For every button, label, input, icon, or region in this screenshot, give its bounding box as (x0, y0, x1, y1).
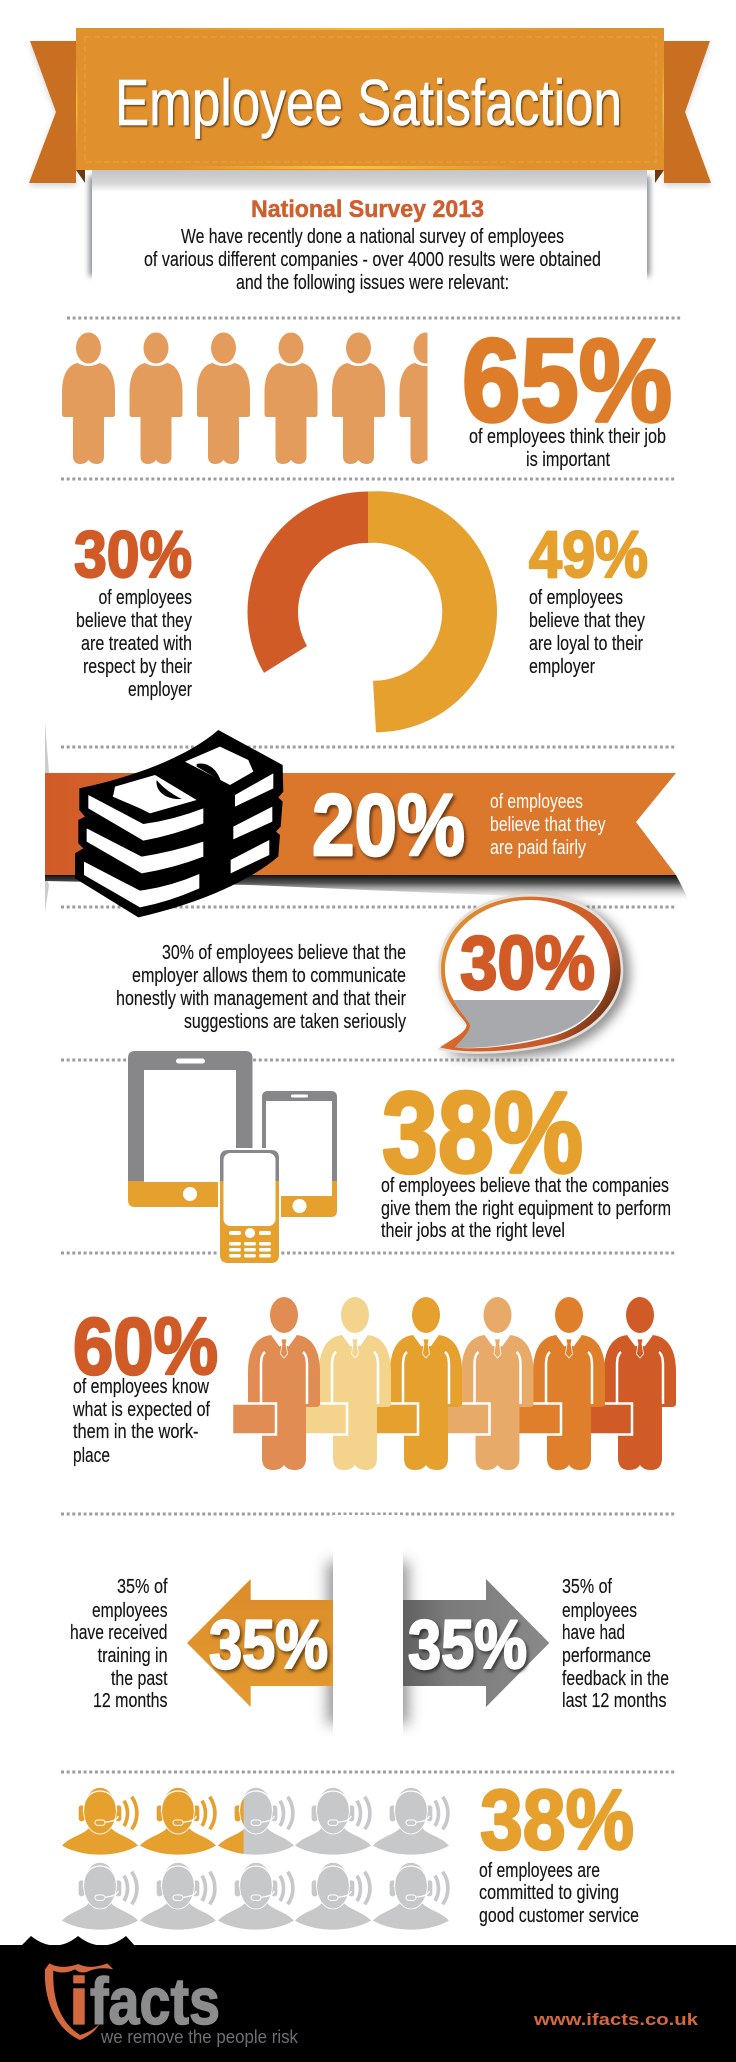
icon: devices (128, 1051, 339, 1265)
caption: of employees think their job (469, 426, 666, 448)
caption loyal: believe that they (529, 610, 645, 632)
caption communication: 30% of employees believe that the (162, 942, 406, 964)
speech bubble (437, 894, 630, 1058)
dotted dividers (61, 318, 682, 1772)
section: equipment (128, 1051, 671, 1265)
caption equipment: give them the right equipment to perform (381, 1198, 671, 1220)
footer (0, 1936, 736, 2062)
stat 38% service: 38% (480, 1773, 634, 1868)
caption training: training in (98, 1645, 168, 1667)
icon: stack of money (75, 730, 283, 917)
caption training: the past (111, 1668, 168, 1690)
caption equipment (381, 1175, 671, 1242)
caption expectations: them in the work- (73, 1421, 198, 1443)
arrow: left orange: 35% (209, 1606, 328, 1683)
caption equipment: of employees believe that the companies (381, 1175, 669, 1197)
caption expectations: of employees know (73, 1376, 209, 1398)
caption feedback: 35% of (562, 1576, 612, 1598)
icon: tablet (128, 1051, 252, 1207)
caption respect: respect by their (83, 656, 192, 678)
donut (247, 491, 497, 732)
section: 20% pay banner (45, 722, 690, 917)
caption respect: are treated with (81, 633, 192, 655)
website url: www.ifacts.co.uk (533, 2010, 699, 2029)
caption pay (490, 791, 606, 859)
caption pay: of employees (490, 791, 583, 813)
stat 20%: 20% (312, 777, 465, 874)
caption feedback (562, 1576, 669, 1712)
caption communication: suggestions are taken seriously (184, 1011, 406, 1033)
caption loyal: employer (529, 656, 595, 678)
title ribbon (29, 28, 711, 305)
caption loyal: of employees (529, 587, 623, 609)
caption respect (76, 587, 192, 701)
section: communication speech bubble (116, 894, 630, 1058)
caption training: have received (70, 1622, 168, 1644)
section: customer service (62, 1773, 639, 1930)
icon: shield (45, 1963, 113, 2040)
stat 60%: 60% (73, 1302, 218, 1392)
caption feedback: employees (562, 1600, 637, 1622)
icon row: people (62, 332, 452, 464)
caption pay: believe that they (490, 814, 606, 836)
section: expectations (72, 1297, 676, 1470)
logo: ifacts (45, 1963, 299, 2047)
caption communication: employer allows them to communicate (132, 965, 406, 987)
caption equipment: their jobs at the right level (381, 1220, 565, 1242)
caption service (479, 1860, 639, 1927)
caption respect: employer (128, 679, 192, 701)
intro text (144, 196, 601, 294)
caption communication: honestly with management and that their (116, 988, 406, 1010)
caption training: employees (92, 1600, 168, 1622)
arrow: right grey: 35% (408, 1606, 527, 1683)
icon: smartphone (260, 1089, 339, 1219)
stat 30% communication: 30% (460, 921, 595, 1006)
subheading: National Survey 2013 (251, 196, 484, 223)
caption training: 35% of (117, 1576, 168, 1598)
caption training (70, 1576, 168, 1712)
caption service: of employees are (479, 1860, 600, 1882)
caption respect: believe that they (76, 610, 192, 632)
caption service: committed to giving (479, 1882, 619, 1904)
stat 38% equipment: 38% (382, 1069, 583, 1197)
caption expectations: what is expected of (72, 1399, 210, 1421)
intro text: and the following issues were relevant: (236, 272, 509, 294)
arrow: left orange (187, 1579, 333, 1707)
caption feedback: last 12 months (562, 1690, 666, 1712)
stat 30% respect: 30% (74, 517, 192, 591)
section: 65% job importance (62, 332, 671, 470)
intro text: of various different companies - over 4000 results were obtained (144, 249, 601, 271)
caption expectations (72, 1376, 210, 1467)
caption pay: are paid fairly (490, 837, 586, 859)
icon row: businessmen with briefcases (232, 1297, 676, 1470)
caption feedback: performance (562, 1645, 651, 1667)
caption (469, 426, 666, 471)
caption feedback: feedback in the (562, 1668, 669, 1690)
caption communication (116, 942, 406, 1033)
logo: ifacts: facts (90, 1964, 220, 2038)
caption loyal (529, 587, 645, 678)
section: donut chart (74, 491, 648, 732)
caption: is important (526, 449, 610, 471)
ribbon banner (45, 773, 676, 875)
stat 49% loyal: 49% (529, 517, 648, 591)
section: training and feedback arrows (70, 1515, 669, 1770)
caption service: good customer service (479, 1905, 639, 1927)
caption training: 12 months (93, 1690, 168, 1712)
stat 65%: 65% (462, 315, 672, 447)
caption respect: of employees (98, 587, 192, 609)
logo: ifacts: we remove the people risk (100, 2027, 299, 2047)
icon grid: headset agents (62, 1787, 449, 1930)
arrow: right grey (403, 1579, 549, 1707)
logo: ifacts: i (69, 1964, 89, 2038)
caption expectations: place (73, 1445, 110, 1467)
icon: keypad phone (218, 1148, 281, 1265)
caption feedback: have had (562, 1622, 625, 1644)
intro text: We have recently done a national survey of employees (181, 226, 564, 248)
caption loyal: are loyal to their (529, 633, 643, 655)
